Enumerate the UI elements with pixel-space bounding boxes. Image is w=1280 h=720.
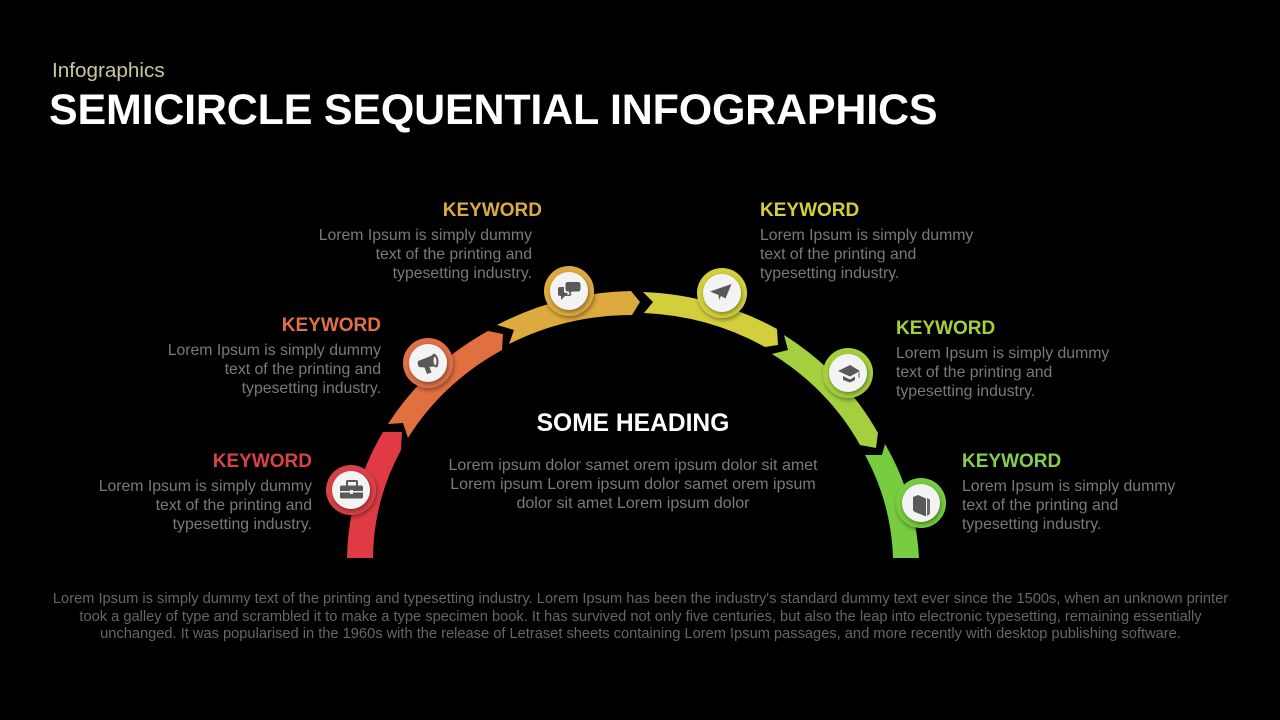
- arc segment 4: yellow: [643, 292, 778, 347]
- keyword block 6: green: text of the printing and: [962, 497, 1118, 514]
- node 5: graduation cap icon: [823, 348, 873, 398]
- keyword block 6: green: [962, 451, 1176, 533]
- keyword block 1: red: Lorem Ipsum is simply dummy: [99, 478, 312, 495]
- keyword block 4: yellow: KEYWORD: [760, 200, 859, 221]
- center text: Lorem ipsum Lorem ipsum dolor samet orem ipsum: [450, 476, 816, 493]
- keyword block 5: lime: typesetting industry.: [896, 383, 1035, 400]
- keyword block 5: lime: Lorem Ipsum is simply dummy: [896, 345, 1109, 362]
- keyword block 1: red: typesetting industry.: [173, 516, 312, 533]
- center text: Lorem ipsum dolor samet orem ipsum dolor sit amet: [448, 457, 818, 474]
- keyword block 2: orange: KEYWORD: [282, 315, 381, 336]
- keyword block 2: orange: text of the printing and: [225, 361, 381, 378]
- node 6: book icon: [896, 478, 946, 528]
- keyword block 4: yellow: Lorem Ipsum is simply dummy: [760, 227, 973, 244]
- arc segment 3: gold: [497, 291, 640, 344]
- keyword block 3: gold: KEYWORD: [443, 200, 542, 221]
- footer paragraph: unchanged. It was popularised in the 1960s with the release of Letraset sheets containing Lorem Ipsum passages, and more recently with desktop publishing software.: [100, 626, 1181, 642]
- node 1: briefcase icon: [326, 465, 376, 515]
- keyword block 6: green: Lorem Ipsum is simply dummy: [962, 478, 1175, 495]
- keyword block 4: yellow: typesetting industry.: [760, 265, 899, 282]
- keyword block 6: green: typesetting industry.: [962, 516, 1101, 533]
- keyword block 3: gold: [319, 200, 542, 282]
- arc segment 2: orange: [388, 331, 503, 438]
- footer paragraph: Lorem Ipsum is simply dummy text of the printing and typesetting industry. Lorem Ipsum has been the industry's standard dummy text ever since the 1500s, when an unknown printer: [53, 591, 1228, 607]
- footer paragraph: took a galley of type and scrambled it to make a type specimen book. It has survived not only five centuries, but also the leap into electronic typesetting, remaining essentially: [79, 608, 1202, 624]
- node 2: megaphone icon: [403, 338, 453, 388]
- node 4: paper plane icon: [697, 268, 747, 318]
- keyword block 2: orange: Lorem Ipsum is simply dummy: [168, 342, 381, 359]
- subtitle: Infographics: [52, 59, 165, 82]
- keyword block 3: gold: typesetting industry.: [393, 265, 532, 282]
- title: SEMICIRCLE SEQUENTIAL INFOGRAPHICS: [49, 86, 937, 134]
- keyword block 5: lime: KEYWORD: [896, 318, 995, 339]
- keyword block 3: gold: Lorem Ipsum is simply dummy: [319, 227, 532, 244]
- center text: [448, 457, 818, 512]
- keyword block 2: orange: typesetting industry.: [242, 380, 381, 397]
- keyword block 1: red: text of the printing and: [156, 497, 312, 514]
- keyword block 5: lime: text of the printing and: [896, 364, 1052, 381]
- keyword block 3: gold: text of the printing and: [376, 246, 532, 263]
- keyword block 1: red: [99, 451, 312, 533]
- arc segment 1: red: [347, 432, 402, 558]
- keyword block 6: green: KEYWORD: [962, 451, 1061, 472]
- center text: dolor sit amet Lorem ipsum dolor: [516, 495, 749, 512]
- keyword block 4: yellow: [760, 200, 974, 282]
- footer paragraph: [53, 591, 1228, 642]
- arc segment 5: lime: [772, 335, 878, 448]
- keyword block 4: yellow: text of the printing and: [760, 246, 916, 263]
- center heading: SOME HEADING: [537, 410, 729, 437]
- keyword block 5: lime: [896, 318, 1110, 400]
- arc segment 6: green: [865, 444, 919, 558]
- keyword block 1: red: KEYWORD: [213, 451, 312, 472]
- node 3: speech bubbles icon: [544, 266, 594, 316]
- keyword block 2: orange: [168, 315, 381, 397]
